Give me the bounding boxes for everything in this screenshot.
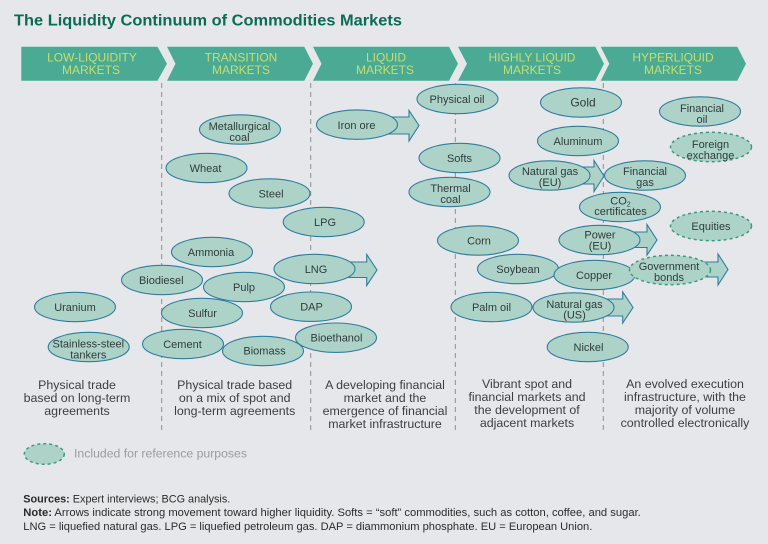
chevron: hyperliquid markets: MARKETS [644,63,702,77]
description: highly liquid markets: financial markets and [468,390,586,404]
description: low-liquidity markets: based on long-term [24,391,130,405]
bubble: stainless-steel tankers: Stainless-steel [53,338,124,350]
chevron: low-liquidity markets: MARKETS [62,63,120,77]
bubble: cement: Cement [163,339,202,351]
footnotes: Sources: Expert interviews; BCG analysis. [23,494,230,506]
bubble: power EU with arrow [559,224,657,255]
chevron: liquid markets: LIQUID [366,50,406,64]
bubble: financial gas [604,161,686,190]
bubble: financial oil: Financial [680,103,724,115]
bubble: natural gas EU with arrow: Natural gas [522,166,579,178]
chevron: liquid markets [313,47,458,81]
bubble: thermal coal: coal [440,194,461,206]
description: highly liquid markets: the development of [474,403,580,417]
description: highly liquid markets [468,377,586,430]
chevron: hyperliquid markets [601,47,746,81]
bubble: stainless-steel tankers: tankers [70,350,107,362]
description: liquid markets: market infrastructure [328,417,442,431]
bubble: thermal coal [409,177,490,207]
bubble: LPG [283,207,364,237]
title: The Liquidity Continuum of Commodities Markets [14,12,402,30]
description: transition markets: long-term agreements [174,404,295,418]
bubble: uranium: Uranium [54,302,96,314]
bubble: wheat: Wheat [190,163,221,175]
description: transition markets [174,378,295,418]
footnotes: LNG = liquefied natural gas. LPG = liquefied petroleum gas. DAP = diammonium phosphate. EU = European Union. [23,521,592,533]
bubble: stainless-steel tankers [48,332,129,362]
header chevrons [21,47,746,81]
bubble: government bonds with arrow (reference): Government [639,261,699,273]
bubble: physical oil [417,84,498,114]
chevron: highly liquid markets: HIGHLY LIQUID [489,50,576,64]
bubble: sulfur [162,298,242,328]
bubble: CO2 certificates: 2 [627,202,631,208]
description: liquid markets: A developing financial [325,378,445,392]
bubble: LNG with arrow [274,254,377,286]
bubble: equities (reference) [670,211,752,241]
bubble: pulp: Pulp [233,282,255,294]
bubble: LPG: LPG [314,217,336,229]
bubble: copper [554,260,635,290]
bubble: soybean [478,254,558,284]
bubble: DAP: DAP [300,302,323,314]
bubble: softs [419,143,500,173]
bubble: ammonia [172,237,252,267]
bubble: financial oil: oil [696,114,708,126]
description: transition markets: Physical trade based [177,378,292,392]
bubble: financial gas: gas [636,177,654,189]
bubble: CO2 certificates: CO [610,196,627,208]
bubble: iron ore with arrow [316,110,419,141]
chevron: highly liquid markets: MARKETS [503,63,561,77]
chevron: transition markets: TRANSITION [205,50,277,64]
bubble: sulfur: Sulfur [188,308,217,320]
bubble: biomass: Biomass [243,346,286,358]
bubble: soybean: Soybean [496,264,540,276]
footnotes [23,494,641,533]
bubble: physical oil: Physical oil [429,94,485,106]
bubble: ammonia: Ammonia [188,247,235,259]
bubble: metallurgical coal [200,115,280,144]
description: hyperliquid markets: majority of volume [635,403,735,417]
description: hyperliquid markets: infrastructure, with the [624,390,746,404]
description: low-liquidity markets: agreements [44,404,110,418]
bubble: aluminum: Aluminum [554,136,602,148]
bubble: pulp [204,272,284,302]
description: highly liquid markets: adjacent markets [480,416,574,430]
bubble: natural gas US with arrow: (US) [563,310,586,322]
bubble: power EU with arrow: (EU) [589,240,611,252]
chevron: liquid markets: MARKETS [356,63,414,77]
bubble: natural gas EU with arrow [509,160,604,192]
bubble: bioethanol [296,323,376,352]
footnotes: Note: Arrows indicate strong movement toward higher liquidity. Softs = “soft” commodities, such as cotton, coffee, and sugar. [23,507,641,519]
bubble: biomass [222,336,304,366]
bubble: financial gas: Financial [623,166,667,178]
bubble: corn [438,226,518,255]
bubble: iron ore with arrow: Iron ore [338,120,375,132]
bubble: metallurgical coal: Metallurgical [209,121,270,133]
bubble: metallurgical coal: coal [229,132,250,144]
bubble: foreign exchange (reference): Foreign [692,139,729,151]
chevron: transition markets [167,47,313,81]
bubble: steel: Steel [258,188,284,200]
bubble: financial oil [660,97,740,126]
bubble: gold [540,88,622,117]
bubble: uranium [34,292,116,322]
bubble: equities (reference): Equities [691,221,731,233]
bubble: natural gas EU with arrow: (EU) [539,177,561,189]
description: hyperliquid markets: controlled electronically [621,416,750,430]
bubble: biodiesel [122,265,202,295]
bubble: gold: Gold [570,96,596,110]
description: transition markets: on a mix of spot and [179,391,291,405]
bubble: wheat [166,153,247,183]
chevron: low-liquidity markets: LOW-LIQUIDITY [47,50,137,64]
bubble: palm oil: Palm oil [472,302,511,314]
bubble: palm oil [451,292,532,322]
bubble: natural gas US with arrow: Natural gas [546,299,603,311]
bubble: cement [142,329,224,359]
bubble: natural gas US with arrow [533,292,633,323]
bubble: steel [229,179,310,208]
bubble: softs: Softs [447,153,473,165]
bubble: government bonds with arrow (reference): bonds [654,272,684,284]
description: liquid markets: market and the [344,391,426,405]
bubble: corn: Corn [467,236,491,248]
description: liquid markets: emergence of financial [323,404,447,418]
bubble: CO2 certificates: certificates [594,206,647,218]
chevron: hyperliquid markets: HYPERLIQUID [632,50,714,64]
chevron: low-liquidity markets [21,47,167,81]
description: low-liquidity markets [24,378,130,418]
chevron: highly liquid markets [458,47,604,81]
bubble: power EU with arrow: Power [584,230,616,242]
bubble: foreign exchange (reference): exchange [687,150,734,162]
bubble: CO2 certificates [580,192,660,222]
bubble: aluminum [538,126,618,156]
legend: Included for reference purposes [74,446,247,460]
description: liquid markets [323,378,447,431]
bubble: foreign exchange (reference) [670,132,752,162]
bubble: nickel: Nickel [574,342,603,354]
legend [24,444,247,464]
chevron: transition markets: MARKETS [212,63,270,77]
bubble: nickel [547,332,628,362]
description: low-liquidity markets: Physical trade [38,378,116,392]
bubble: LNG with arrow: LNG [305,264,327,276]
bubble: thermal coal: Thermal [430,183,471,195]
bubble: DAP [270,292,352,321]
bubble: bioethanol: Bioethanol [310,332,362,344]
bubble: copper: Copper [576,270,612,282]
description: highly liquid markets: Vibrant spot and [482,377,572,391]
bubble: biodiesel: Biodiesel [139,275,184,287]
description: hyperliquid markets [621,377,750,430]
description: hyperliquid markets: An evolved execution [626,377,744,391]
bubble: government bonds with arrow (reference) [630,254,728,285]
